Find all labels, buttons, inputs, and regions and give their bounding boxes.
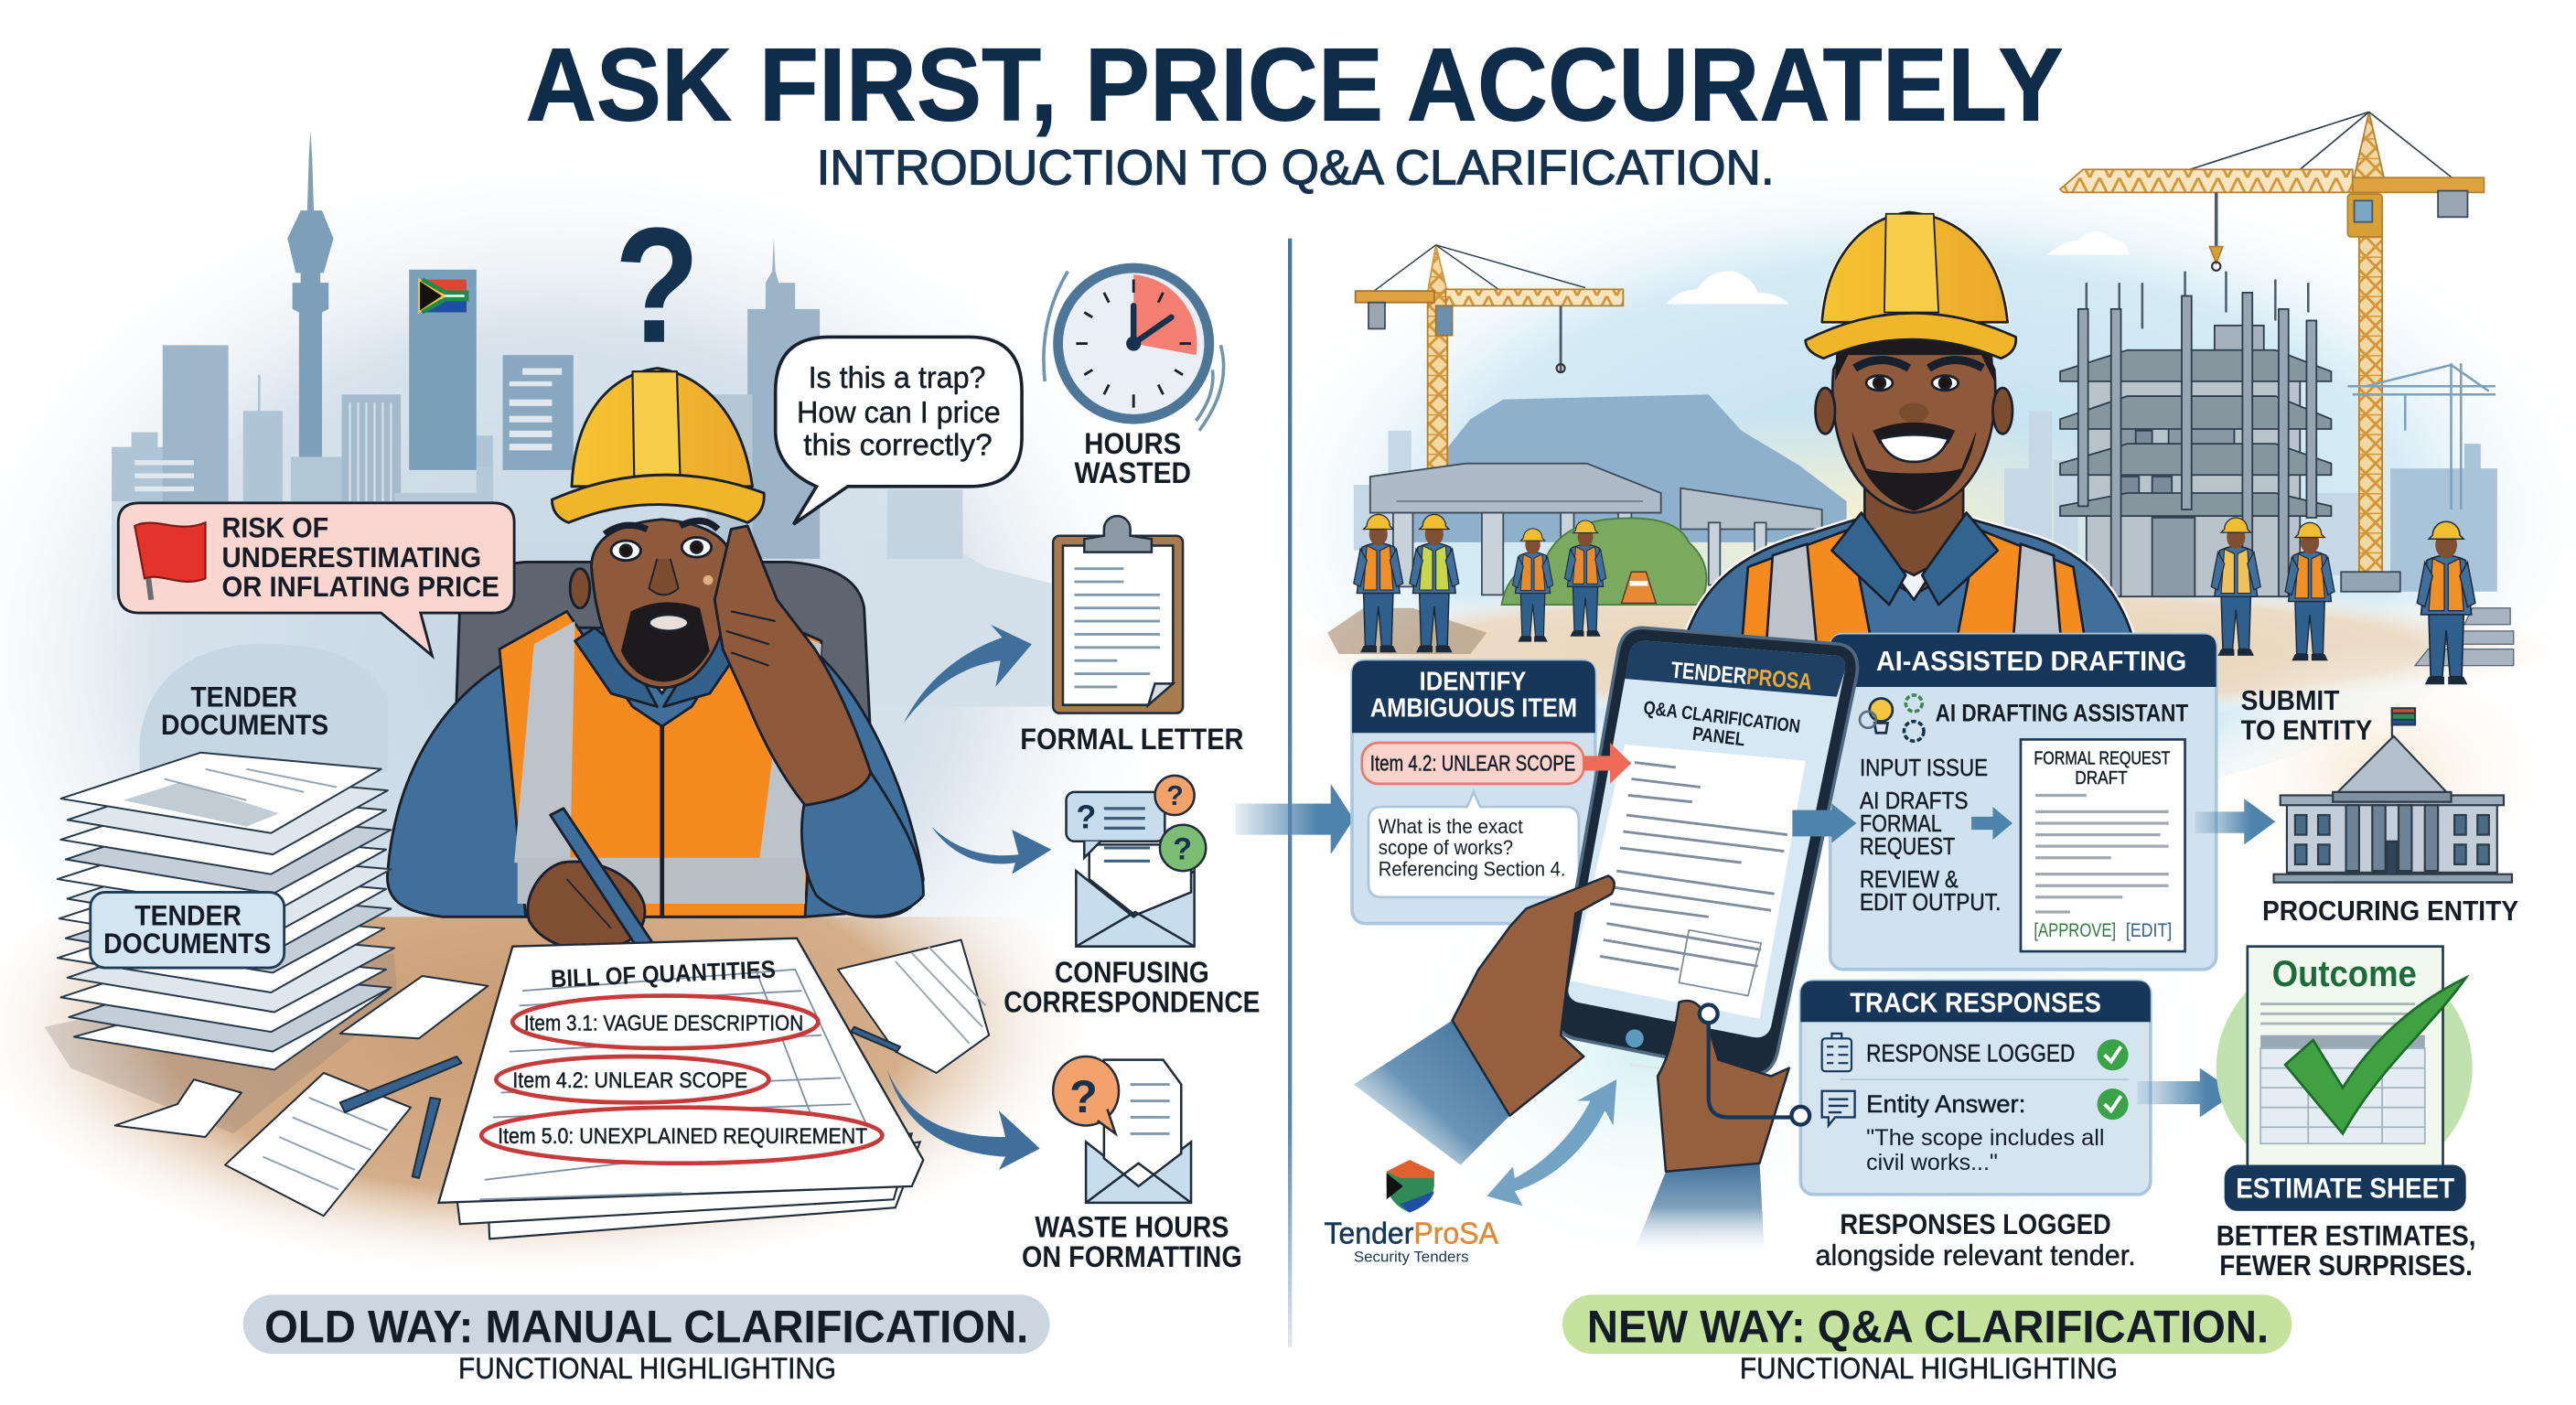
tender documents label box: DOCUMENTS <box>103 928 271 960</box>
new way scene: clouds <box>1666 231 2130 304</box>
icon: green check <box>2097 1039 2129 1070</box>
connector: phone to track responses <box>1700 1004 1809 1125</box>
smartphone: TENDERPROSA <box>1670 658 1813 695</box>
highlighted item 4.2 <box>496 1056 768 1102</box>
right sleeve <box>1633 1160 1765 1254</box>
goatee <box>621 602 710 682</box>
speech bubble: Is this a trap? <box>809 361 986 395</box>
logo: tenderprosa <box>1325 1160 1499 1266</box>
icon: question mark: ? <box>615 194 700 378</box>
panel: ai-assisted drafting: INPUT ISSUE <box>1860 754 1988 781</box>
label: submit to entity: TO ENTITY <box>2241 714 2372 745</box>
new way banner: NEW WAY: Q&A CLARIFICATION. <box>1587 1301 2269 1353</box>
pen <box>551 809 657 960</box>
formal request draft <box>2021 739 2185 951</box>
estimate sheet label <box>2225 1165 2466 1211</box>
icon: confusing correspondence envelope: ? <box>1166 780 1184 811</box>
icon: checklist <box>1822 1034 1852 1071</box>
speech bubble: How can I price <box>797 396 1001 430</box>
smartphone: Q&A CLARIFICATION <box>1642 697 1801 737</box>
highlighted item 3.1: Item 3.1: VAGUE DESCRIPTION <box>524 1011 803 1035</box>
tender documents label, backdrop: TENDER <box>190 681 297 713</box>
callout: risk of mispricing: OR INFLATING PRICE <box>221 571 499 603</box>
panel: identify ambiguous item: AMBIGUOUS ITEM <box>1370 693 1577 723</box>
hard hat <box>1822 212 2008 322</box>
panel: ai-assisted drafting <box>1830 634 2216 970</box>
left hand holding phone <box>1453 875 1615 1116</box>
label: hours wasted: HOURS <box>1084 427 1181 460</box>
tender documents label box: TENDER <box>134 899 242 931</box>
head <box>592 520 733 688</box>
home indicator <box>1630 1065 1686 1071</box>
panel: track responses: TRACK RESPONSES <box>1850 988 2101 1019</box>
label: responses logged <box>1815 1208 2136 1271</box>
panel: track responses: civil works..." <box>1866 1150 1998 1175</box>
icon: confusing correspondence envelope <box>1067 776 1206 947</box>
logo: tenderprosa: TenderProSA <box>1325 1217 1499 1251</box>
formal request draft: [APPROVE] <box>2034 918 2116 941</box>
panel divider <box>1288 239 1292 1347</box>
icon: confusing correspondence envelope: ? <box>1076 798 1096 835</box>
label: submit to entity <box>2241 685 2372 745</box>
hard hat <box>572 369 753 487</box>
label: waste hours on formatting: WASTE HOURS <box>1035 1211 1229 1244</box>
highlighted item 3.1 <box>512 996 818 1048</box>
background: new way sky <box>1232 74 2576 1265</box>
speech bubble <box>776 337 1022 524</box>
callout: risk of mispricing: RISK OF <box>221 512 328 544</box>
building under construction <box>2060 272 2331 596</box>
icon: confusing correspondence envelope: ? <box>1173 832 1192 867</box>
desk <box>12 917 1056 1259</box>
smartphone <box>1555 627 1857 1074</box>
tender documents label, backdrop <box>161 681 328 741</box>
icon: green check <box>2097 1089 2129 1120</box>
title: ASK FIRST, PRICE ACCURATELY <box>526 27 2064 142</box>
label: responses logged: alongside relevant tender. <box>1815 1239 2136 1271</box>
label: waste hours on formatting <box>1022 1211 1242 1273</box>
panel: ai-assisted drafting: REVIEW & <box>1860 865 1959 893</box>
arrow: track responses to outcome <box>2137 1068 2236 1117</box>
tender documents label box <box>91 892 284 968</box>
right worker <box>1682 212 2136 649</box>
callout: risk of mispricing: UNDERESTIMATING <box>221 542 481 574</box>
icon: answer bubble <box>1822 1091 1855 1125</box>
right hand holding phone <box>1658 1001 1789 1172</box>
hi-vis vest <box>1742 530 2087 649</box>
outcome sheet: ESTIMATE SHEET <box>2236 1172 2454 1204</box>
icon: big check mark <box>2285 978 2466 1133</box>
arrow: issue to phone <box>1583 743 1631 784</box>
panel: ai-assisted drafting: AI DRAFTS <box>1860 787 1969 814</box>
icon: clipboard formal letter <box>1053 516 1183 713</box>
panel: identify ambiguous item <box>1352 660 1595 924</box>
question box <box>1368 792 1579 897</box>
panel: track responses: Entity Answer: <box>1866 1090 2025 1118</box>
distant skyline <box>1354 411 2497 592</box>
subtitle: INTRODUCTION TO Q&A CLARIFICATION. <box>817 140 1775 195</box>
old way caption: FUNCTIONAL HIGHLIGHTING <box>458 1352 836 1385</box>
panel: ai-assisted drafting: REQUEST <box>1860 832 1955 860</box>
table mountain <box>1411 394 1847 542</box>
formal request draft: [EDIT] <box>2126 918 2172 941</box>
label: confusing correspondence: CONFUSING <box>1055 956 1209 989</box>
label: better estimates: FEWER SURPRISES. <box>2219 1249 2473 1282</box>
arrow to confusing correspondence <box>931 827 1051 874</box>
panel: ai-assisted drafting: AI DRAFTING ASSISTANT <box>1936 700 2189 727</box>
loose papers and pens on desk <box>115 940 989 1216</box>
smartphone: PANEL <box>1691 724 1746 750</box>
arrow: phone to ai drafting <box>1792 803 1856 843</box>
icon: south african flag on building <box>419 280 467 312</box>
label: waste hours on formatting: ON FORMATTING <box>1022 1240 1242 1273</box>
icon: formatting envelope <box>1053 1056 1191 1203</box>
panel: track responses <box>1800 981 2151 1195</box>
highlighted item 5.0: Item 5.0: UNEXPLAINED REQUIREMENT <box>498 1124 867 1149</box>
label: formal letter: FORMAL LETTER <box>1020 723 1244 756</box>
panel: identify ambiguous item: What is the exact <box>1379 815 1524 838</box>
outcome sheet <box>2216 947 2473 1211</box>
label: hours wasted <box>1075 427 1191 489</box>
label: hours wasted: WASTED <box>1075 456 1191 489</box>
highlighted item 4.2: Item 4.2: UNLEAR SCOPE <box>512 1068 747 1093</box>
panel: track responses: RESPONSE LOGGED <box>1866 1039 2075 1067</box>
arrow to formatting <box>887 1069 1040 1170</box>
logo: tenderprosa: Security Tenders <box>1354 1249 1469 1266</box>
panel: track responses: "The scope includes all <box>1866 1125 2105 1151</box>
formal request draft: FORMAL REQUEST <box>2034 747 2171 768</box>
hi-vis vest <box>499 611 821 917</box>
new way caption: FUNCTIONAL HIGHLIGHTING <box>1740 1352 2118 1385</box>
bill of quantities sheet <box>439 938 923 1239</box>
overpass structure <box>1370 464 1822 595</box>
highlighted item 5.0 <box>481 1108 882 1164</box>
label: responses logged: RESPONSES LOGGED <box>1840 1208 2111 1240</box>
panel: identify ambiguous item: scope of works? <box>1379 836 1513 859</box>
writing hand <box>528 862 645 950</box>
ambiguous item pill <box>1362 743 1583 784</box>
label: submit to entity: SUBMIT <box>2241 685 2340 716</box>
central arrow <box>1236 784 1354 854</box>
stack of tender documents <box>44 753 398 1133</box>
panel: ai-assisted drafting: FORMAL <box>1860 810 1942 837</box>
office chair <box>455 562 871 739</box>
old way skyline <box>112 130 1051 772</box>
torso and shirt <box>387 627 923 917</box>
panel: ai-assisted drafting: AI-ASSISTED DRAFTING <box>1876 646 2186 677</box>
left worker <box>387 369 923 960</box>
icon: red flag <box>134 522 205 600</box>
panel: identify ambiguous item: IDENTIFY <box>1420 668 1526 697</box>
arrow: drafting to entity <box>2195 799 2275 844</box>
label: better estimates: BETTER ESTIMATES, <box>2216 1220 2475 1252</box>
label: confusing correspondence: CORRESPONDENCE <box>1004 986 1260 1019</box>
icon: clock <box>1044 268 1224 431</box>
panel: ai-assisted drafting: EDIT OUTPUT. <box>1860 888 2001 916</box>
icon: lightbulb and gears <box>1860 695 1924 741</box>
rolled sleeve <box>801 772 923 917</box>
outcome sheet: Outcome <box>2272 954 2417 994</box>
old way banner: OLD WAY: MANUAL CLARIFICATION. <box>264 1301 1028 1353</box>
label: better estimates <box>2216 1220 2475 1282</box>
arrow: draft step <box>1971 807 2012 840</box>
bill of quantities sheet: BILL OF QUANTITIES <box>550 956 776 992</box>
phone header <box>1625 641 1845 697</box>
small site workers <box>1354 514 2475 684</box>
tender documents label, backdrop: DOCUMENTS <box>161 709 328 741</box>
large tower crane <box>2060 112 2484 592</box>
arrow to formal letter <box>904 625 1032 723</box>
panel: identify ambiguous item: Item 4.2: UNLEAR SCOPE <box>1370 752 1575 777</box>
curved double arrow <box>1487 1079 1616 1206</box>
icon: formatting envelope: ? <box>1069 1070 1098 1122</box>
eyes and brows <box>605 520 718 595</box>
document on phone <box>1571 745 1806 1019</box>
panel: identify ambiguous item: Referencing Section 4. <box>1379 857 1566 880</box>
left sleeve <box>1354 1021 1509 1165</box>
icon: procuring entity building <box>2274 708 2512 883</box>
neck and undershirt <box>1864 485 1963 595</box>
collar <box>575 627 746 706</box>
speech bubble: this correctly? <box>803 429 993 463</box>
callout: risk of mispricing <box>118 503 514 656</box>
distant crane <box>2347 363 2496 509</box>
head <box>1832 337 1995 513</box>
small tower crane <box>1356 245 1623 473</box>
label: confusing correspondence <box>1004 956 1260 1019</box>
label: procuring entity: PROCURING ENTITY <box>2262 896 2518 927</box>
beard <box>1852 431 1976 511</box>
bush and cone <box>1327 518 2514 666</box>
raised forearm and hand at temple <box>714 526 871 805</box>
formal request draft: DRAFT <box>2075 767 2128 788</box>
